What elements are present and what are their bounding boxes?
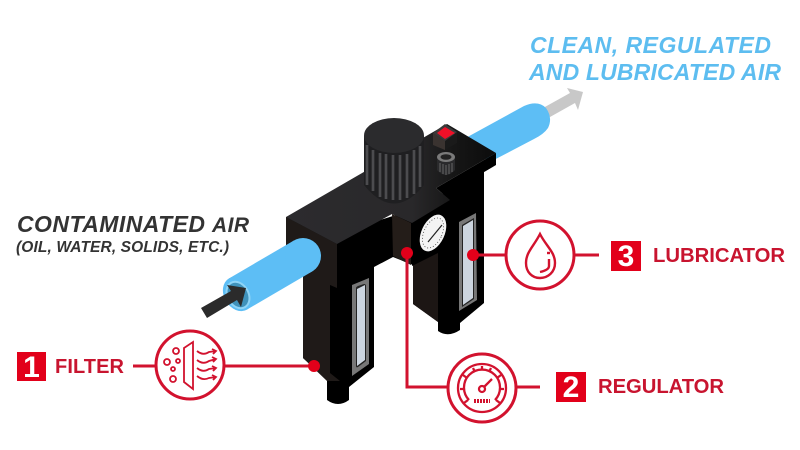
heading: clean air: CLEAN, REGULATED [530, 32, 771, 58]
badge: 1 filter: FILTER [55, 356, 125, 378]
connector: lubricator [467, 249, 599, 261]
icon: oil drop [506, 221, 574, 289]
badge: 2 regulator: 2 [563, 371, 579, 404]
left module [286, 217, 374, 404]
badge: 2 regulator [556, 371, 724, 404]
badge: 3 lubricator: LUBRICATOR [653, 245, 785, 267]
sight glass: lubricator [459, 213, 477, 311]
badge: 1 filter: 1 [23, 351, 40, 384]
heading: contaminated air: (OIL, WATER, SOLIDS, ETC.) [16, 239, 229, 256]
icon: gauge [448, 354, 516, 422]
heading: contaminated air: AIR [211, 214, 250, 237]
indicator button [433, 124, 457, 150]
heading: clean air: AND LUBRICATED AIR [528, 59, 781, 85]
heading: clean air [528, 32, 781, 85]
device body [286, 124, 496, 404]
arrow: clean air out [543, 88, 583, 117]
badge: 2 regulator: REGULATOR [598, 376, 724, 398]
heading: contaminated air: CONTAMINATED [17, 211, 205, 237]
body top face [286, 124, 496, 244]
tube: outlet [462, 103, 550, 162]
tube: inlet [217, 238, 321, 317]
badge: 1 filter [17, 351, 125, 384]
connector: regulator [401, 247, 540, 387]
regulator knob [364, 118, 424, 204]
small adjuster knob [437, 152, 455, 175]
badge: 3 lubricator [611, 240, 785, 273]
badge: 3 lubricator: 3 [618, 240, 634, 273]
right module [374, 165, 496, 334]
arrow: contaminated air in [201, 285, 246, 318]
connector: filter [133, 360, 320, 372]
sight glass: filter [352, 278, 369, 376]
icon: filter [156, 331, 224, 399]
pressure gauge [414, 210, 452, 256]
heading: contaminated air [16, 211, 250, 256]
